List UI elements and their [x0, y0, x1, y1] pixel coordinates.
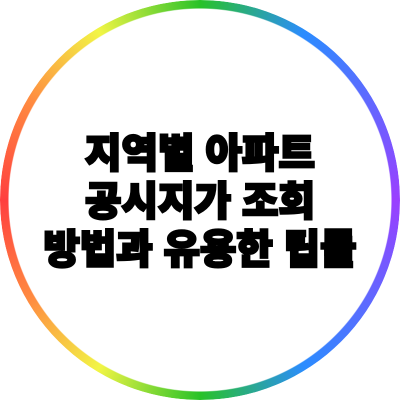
title: 공시지가 조회	[85, 180, 315, 224]
title: 지역별 아파트	[85, 132, 315, 176]
title: 방법과 유용한 팁들	[44, 228, 356, 272]
